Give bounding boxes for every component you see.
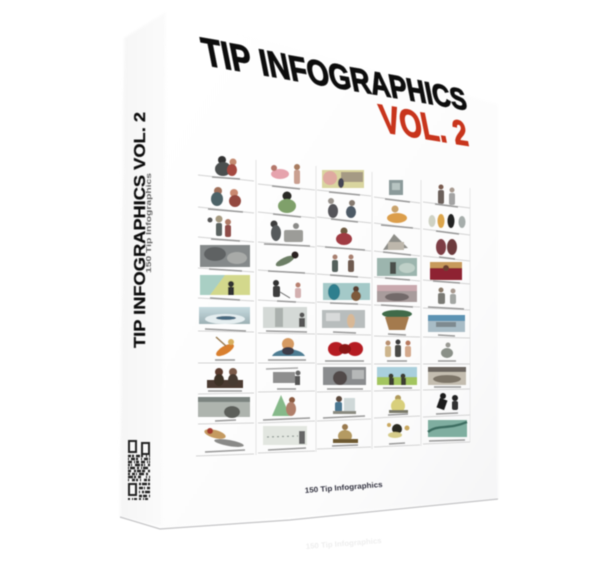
floor reflection of caption: 150 Tip Infographics <box>305 536 382 551</box>
thumb r5c1 <box>198 275 254 301</box>
thumb r7c2 <box>258 338 315 363</box>
thumb r10c5 <box>423 420 470 444</box>
thumb r7c5 <box>423 342 470 364</box>
thumb r3c4 <box>374 234 420 256</box>
thumb r7c1 <box>198 337 254 363</box>
thumb r7c4 <box>374 340 420 364</box>
thumb r1c2 <box>258 164 315 190</box>
thumb r3c5 <box>423 239 470 261</box>
thumb r4c4 <box>374 258 420 281</box>
thumb r10c1 <box>196 427 254 456</box>
front caption: 150 Tip Infographics <box>304 480 383 495</box>
thumb r1c1 <box>198 156 254 181</box>
spine subtitle: 150 Tip Infographics <box>146 173 153 273</box>
thumb r2c5 <box>423 214 470 235</box>
thumb r9c3 <box>317 396 371 421</box>
thumb r1c3 <box>317 170 371 196</box>
thumb r10c2 <box>258 426 315 453</box>
thumb r4c1 <box>198 245 254 272</box>
thumb r6c3 <box>317 310 371 335</box>
thumb r2c2 <box>258 192 315 218</box>
thumb r6c5 <box>423 315 470 338</box>
thumb r4c2 <box>258 252 315 274</box>
thumb r6c2 <box>258 307 315 334</box>
box spine <box>120 12 172 529</box>
thumb r8c5 <box>423 367 470 390</box>
box front face <box>161 12 498 529</box>
thumb r1c4 <box>374 180 420 203</box>
thumb r2c1 <box>198 187 254 213</box>
icon: QR code on spine <box>128 441 150 499</box>
thumb r8c1 <box>198 368 254 394</box>
spine title: TIP INFOGRAPHICS VOL. 2 <box>132 112 149 348</box>
thumbnail grid <box>196 156 470 456</box>
thumb r3c2 <box>258 220 315 247</box>
thumb r9c1 <box>198 397 254 424</box>
thumb r5c4 <box>374 285 420 307</box>
thumb r6c4 <box>374 310 420 337</box>
box bottom edge <box>120 499 498 529</box>
thumb r2c3 <box>317 198 371 223</box>
thumb r6c1 <box>198 307 254 332</box>
thumb r8c2 <box>258 368 315 392</box>
thumb r10c3 <box>317 424 371 449</box>
thumb r5c2 <box>258 280 315 303</box>
title: TIP INFOGRAPHICS <box>198 29 470 119</box>
thumb r8c3 <box>317 367 371 392</box>
thumb r9c5 <box>423 393 470 417</box>
product box <box>120 12 498 529</box>
thumb r4c3 <box>317 254 371 278</box>
thumb r9c4 <box>374 395 420 418</box>
thumb r10c4 <box>374 423 420 447</box>
thumb r3c1 <box>198 216 254 242</box>
thumb r5c5 <box>423 288 470 310</box>
thumb r8c4 <box>374 367 420 391</box>
thumb r5c3 <box>317 283 371 305</box>
thumb r2c4 <box>374 206 420 229</box>
thumb r4c5 <box>423 262 470 284</box>
thumb r7c3 <box>317 342 371 364</box>
thumb r9c2 <box>258 395 315 423</box>
volume heading: VOL. 2 <box>376 96 471 155</box>
thumb r3c3 <box>317 228 371 251</box>
thumb r1c5 <box>423 184 470 208</box>
